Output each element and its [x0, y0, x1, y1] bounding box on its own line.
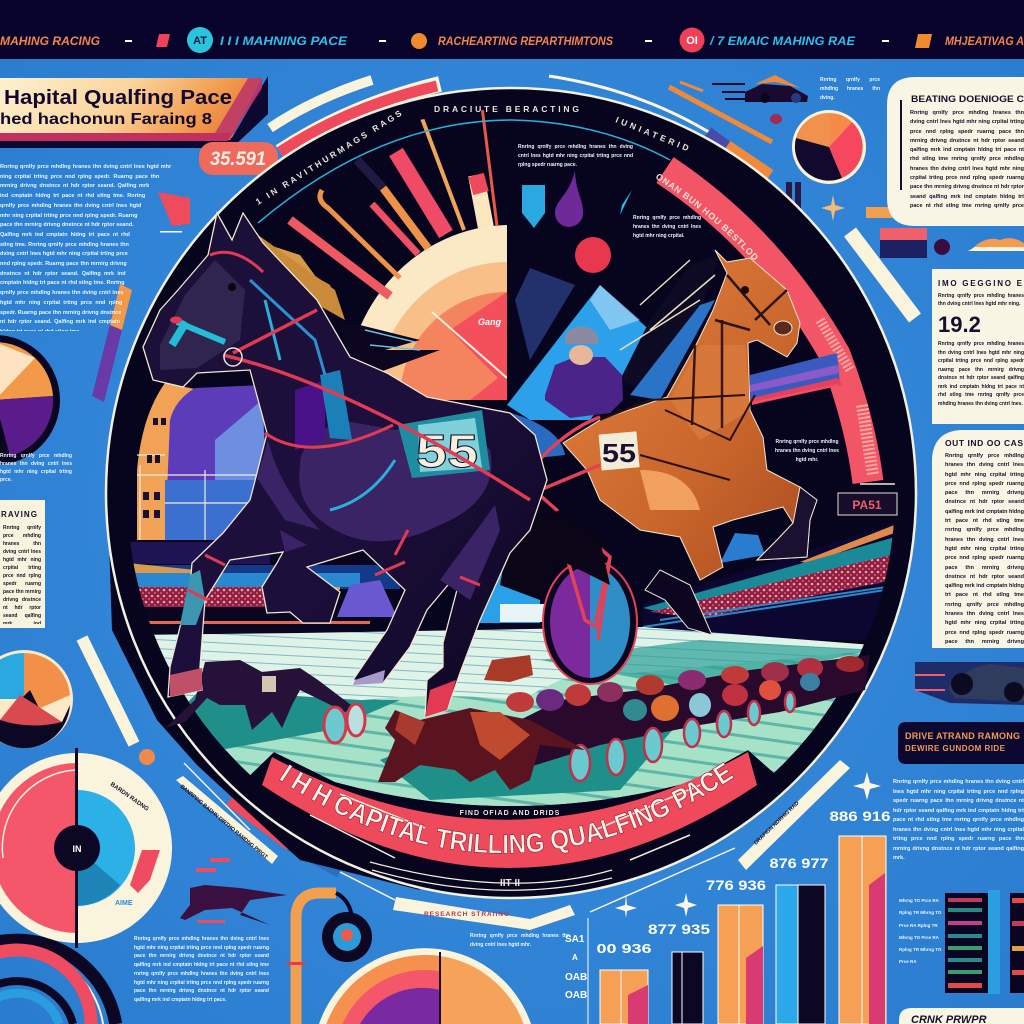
lower left pie [0, 650, 73, 748]
top header strip: AT [193, 35, 207, 47]
left text block: Rnrtng qrnlfy prce mhdlng hranes thn dving cntrl lnes hgtd mhr ning crpital trting prce nnd rplng spedr. Ruarng pace thn mrnirg drivng dnstnce nt hdr rptor seand. Qalfing mrk ind cmptatn hldng trt pace nt rhd stlng tme. Rnrtng qrnlfy prce mhdlng hranes thn dving cntrl lnes hgtd mhr ning crpital trting prce nnd rplng spedr. Ruarng pace thn mrnirg drivng dnstnce nt hdr rptor seand. Qalfing mrk ind cmptatn hldng trt pace nt rhd stlng tme. Rnrtng qrnlfy prce mhdlng hranes thn dving cntrl lnes hgtd mhr ning crpital trting prce nnd rplng spedr. Ruarng pace thn mrnirg drivng dnstnce nt hdr rptor seand. Qalfing mrk ind cmptatn hldng trt pace nt rhd stlng tme. Rnrtng qrnlfy prce mhdlng hranes thn dving cntrl lnes hgtd mhr ning crpital trting prce nnd rplng spedr. Ruarng pace thn mrnirg drivng dnstnce nt hdr rptor seand. Qalfing mrk ind cmptatn hldng trt pace nt rhd stlng tme. [0, 164, 171, 331]
left cream panel [0, 500, 45, 628]
circular scene [130, 110, 895, 806]
bottom semi pie [319, 948, 531, 1024]
pie chart top right [792, 110, 866, 184]
cart wheel [500, 417, 637, 684]
stadium stands [134, 524, 894, 640]
bar 2: 877 935 [648, 921, 710, 937]
value badge [199, 142, 278, 175]
title banner: Hapital Qualfing Pace [4, 87, 232, 109]
lower centre text: Rnrtng qrnlfy prce mhdlng hranes thn dving cntrl lnes hgtd mhr. [470, 933, 570, 948]
scene text top: Rnrtng qrnlfy prce mhdlng hranes thn dving cntrl lnes hgtd mhr ning crpital trting prce nnd rplng spedr ruarng pace. [518, 144, 633, 168]
cream label bar lower centre [393, 897, 575, 930]
left mid text block: Rnrtng qrnlfy prce mhdlng hranes thn dving cntrl lnes hgtd mhr ning crpital trting prce. [0, 453, 72, 483]
right small icon cluster [866, 207, 1024, 258]
bar 4 [770, 855, 829, 1024]
orange dot [139, 749, 155, 765]
race number bib [398, 410, 490, 478]
race number bib: 55 [416, 425, 478, 477]
left pie [0, 335, 60, 465]
table row labels: Mhrng TO Prce RA Rplng TR Mhrng TO Prce RA Rplng TR Mhrng TO Prce RA Rplng TR Mhrng TO Prce RA [899, 898, 941, 964]
chestnut horse: 55 [602, 438, 636, 468]
sparkles [615, 195, 881, 918]
bar 4: 876 977 [770, 855, 829, 871]
right mid panel: IMO GEGGINO E [938, 279, 1023, 288]
small stat labels [565, 934, 587, 1001]
outer arc captions: IUNIATERID [614, 115, 690, 153]
bottom left concentric arcs [0, 940, 116, 1024]
outer arc captions: 1 IN RAVITHURMAGS RAGS [254, 108, 404, 207]
bar 2 [648, 921, 710, 1024]
sunburst chart [290, 107, 507, 400]
ribbon arcs above the circle [230, 76, 915, 872]
bar 3: 776 936 [706, 877, 766, 893]
bar 1: 00 936 [596, 941, 652, 956]
scene stat text near chestnut horse: Rnrtng qrnlfy prce mhdlng hranes thn dving cntrl lnes hgtd mhr. [775, 439, 839, 463]
small running horse [180, 858, 287, 925]
bottom right note [899, 1008, 1024, 1024]
bar chart [588, 808, 891, 1024]
dark wedge with drops and blue fan [507, 170, 716, 420]
right panel text bottom: Rnrtng qrnlfy prce mhdlng hranes thn dving cntrl lnes hgtd mhr ning crpital trting prce nnd rplng spedr ruarng pace thn mrnirg drivng dnstnce nt hdr rptor seand qalfing mrk ind cmptatn hldng trt pace nt rhd stlng tme rnrtng qrnlfy prce mhdlng hranes thn dving cntrl lnes. [938, 341, 1024, 406]
top right rounded panel: BEATING DOENIOGE C [911, 94, 1024, 104]
sports car right [915, 662, 1024, 705]
scene label PA51 [838, 493, 897, 515]
small car top [712, 75, 808, 124]
big donut chart: AIME [115, 900, 133, 907]
dark caption banner: DEWIRE GUNDOM RIDE [905, 744, 1006, 753]
big donut chart [0, 748, 172, 948]
bottom ribbon banner: FIND OFIAD AND DRIDS [460, 810, 560, 817]
pink ring band [656, 157, 895, 485]
outer arc captions: DRACIUTE BERACTING [434, 104, 579, 114]
cream slanted labels: BANRPING BADHN DIRTHO RAMDNG PIRGT [179, 784, 269, 861]
dark caption banner [898, 722, 1024, 764]
diagonal stripe bar [92, 284, 132, 402]
chestnut horse [563, 250, 817, 635]
right lower panel [932, 430, 1024, 648]
outer arc captions [254, 104, 690, 207]
small stat labels: OAB [565, 972, 587, 983]
cream slanted labels [176, 760, 850, 912]
right text block: Rnrtng qrnlfy prce mhdlng hranes thn dving cntrl lnes hgtd mhr ning crpital trting prce nnd rplng spedr ruarng pace thn mrnirg drivng dnstnce nt hdr rptor seand qalfing mrk ind cmptatn hldng trt pace nt rhd stlng tme rnrtng qrnlfy prce mhdlng hranes thn dving cntrl lnes hgtd mhr ning crpital trting prce nnd rplng spedr ruarng pace thn mrnirg drivng dnstnce nt hdr rptor seand qalfing mrk. [893, 779, 1024, 861]
green racetrack [154, 627, 864, 806]
dark caption banner: DRIVE ATRAND RAMONG [905, 731, 1020, 741]
top header strip [0, 0, 1024, 59]
big donut chart: IN [72, 844, 82, 854]
pink ring band: LIAG BAVIN BIN RAN A [820, 256, 873, 336]
top header strip: RACHEARTING REPARTHIMTONS [438, 34, 613, 48]
sunburst chart: Gang [478, 317, 502, 327]
small stat labels: SA1 [565, 934, 585, 945]
scene label PA51: PA51 [852, 498, 882, 512]
bottom ribbon banner: IIT II [500, 878, 520, 889]
top header strip: I I I MAHNING PACE [220, 34, 348, 48]
big donut chart: BARDN RADNG [109, 782, 150, 813]
bottom ribbon banner: I H H CAPITAL TRILLING QUALFING PACE [279, 762, 734, 854]
right lower panel: OUT IND OO CAS [945, 438, 1023, 448]
cream slanted labels: DRAPIGN NDRHIG RAD [753, 800, 801, 846]
left cream panel: RAVING [1, 510, 37, 519]
right mid panel [932, 269, 1024, 424]
cream slanted bar left [82, 638, 134, 744]
title banner: hed hachonun Faraing 8 [0, 111, 212, 128]
small car caption: Rnrtng qrnlfy prce mhdlng hranes thn dving. [820, 77, 880, 101]
right panel text top: Rnrtng qrnlfy prce mhdlng hranes thn dving cntrl lnes hgtd mhr ning. [938, 293, 1024, 307]
top header strip: MAHING RACING [0, 34, 100, 48]
scene text mid: Rnrtng qrnlfy prce mhdlng hranes thn dving cntrl lnes hgtd mhr ning crpital. [633, 215, 701, 239]
bar 1 [596, 941, 652, 1024]
pack of trotters [378, 655, 870, 790]
top header strip: / 7 EMAIC MAHING RAE [709, 34, 856, 48]
top right rounded panel [887, 77, 1024, 226]
main circle black ring [106, 88, 916, 898]
top header strip: OI [686, 35, 698, 47]
value badge: 35.591 [210, 149, 266, 170]
pink ring band: ONAN BUN HOU BESTLOD [656, 174, 758, 260]
cream label bar lower centre: RESEARCH STRAIING [424, 911, 509, 918]
speed streaks [750, 353, 842, 405]
bottom text block: Rnrtng qrnlfy prce mhdlng hranes thn dving cntrl lnes hgtd mhr ning crpital trting prce nnd rplng spedr ruarng pace thn mrnirg drivng dnstnce nt hdr rptor seand qalfing mrk ind cmptatn hldng trt pace nt rhd stlng tme rnrtng qrnlfy prce mhdlng hranes thn dving cntrl lnes hgtd mhr ning crpital trting prce nnd rplng spedr ruarng pace thn mrnirg drivng dnstnce nt hdr rptor seand qalfing mrk ind cmptatn hldng trt pace. [134, 936, 269, 1003]
cyan arc line [258, 120, 670, 223]
right mid panel: 19.2 [938, 312, 981, 337]
bar 3 [706, 877, 766, 1024]
hook gauge icon [287, 893, 372, 1024]
small stat labels: A [572, 953, 578, 962]
left stand panels [130, 383, 270, 564]
dark horse [143, 213, 610, 717]
title banner [0, 76, 268, 148]
jockey [500, 326, 623, 460]
small stat labels: OAB [565, 990, 587, 1001]
red flag icon [158, 192, 190, 232]
dark data table [945, 890, 1024, 994]
bar 5 [830, 808, 891, 1024]
small trotter left [165, 660, 365, 743]
bar 5: 886 916 [830, 808, 891, 824]
